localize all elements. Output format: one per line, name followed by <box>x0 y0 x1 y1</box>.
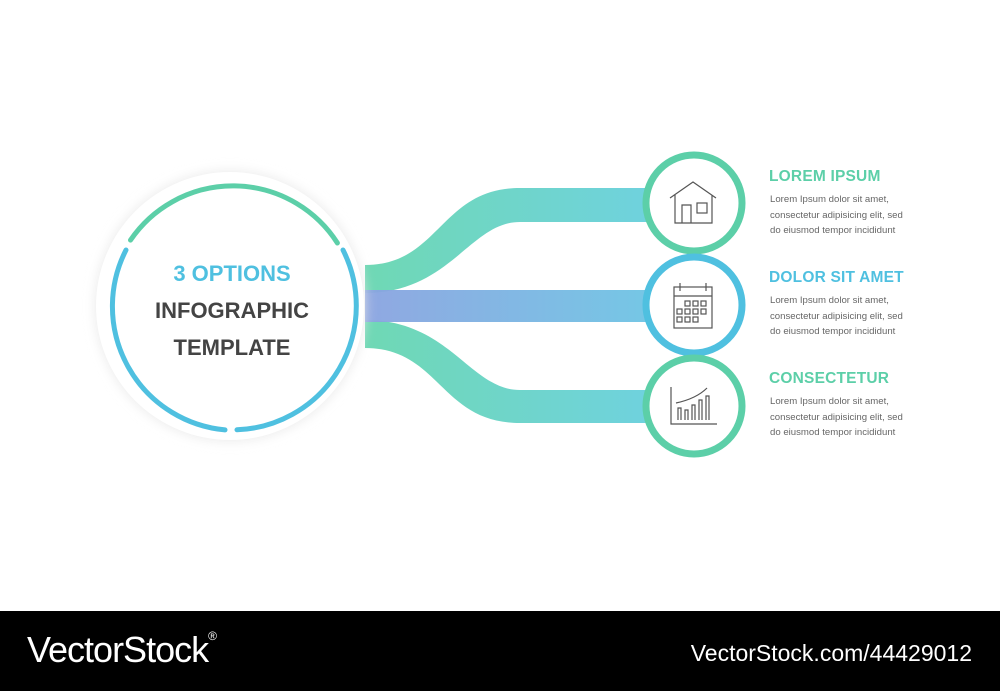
footer bar <box>0 611 1000 691</box>
option 3 text <box>769 370 903 438</box>
band: top <box>365 188 650 293</box>
text: LOREM IPSUM <box>769 168 881 185</box>
option 2 text <box>769 269 904 337</box>
text: DOLOR SIT AMET <box>769 269 904 286</box>
text: do eiusmod tempor incididunt <box>770 326 895 337</box>
text: Lorem Ipsum dolor sit amet, <box>770 295 889 306</box>
central circle: TEMPLATE <box>174 335 290 360</box>
circle 1: house <box>646 155 742 251</box>
option 1 text <box>769 168 903 236</box>
footer url: VectorStock.com/44429012 <box>691 640 972 666</box>
central circle <box>96 172 364 440</box>
text: consectetur adipisicing elit, sed <box>770 412 903 422</box>
text: CONSECTETUR <box>769 370 889 387</box>
central circle: INFOGRAPHIC <box>155 298 309 323</box>
text: Lorem Ipsum dolor sit amet, <box>770 194 889 205</box>
text: do eiusmod tempor incididunt <box>770 225 895 236</box>
text: consectetur adipisicing elit, sed <box>770 210 903 220</box>
band: bottom <box>365 320 650 423</box>
central circle: 3 OPTIONS <box>173 261 291 286</box>
footer logo: VectorStock® <box>27 629 216 670</box>
text: do eiusmod tempor incididunt <box>770 427 895 438</box>
text: Lorem Ipsum dolor sit amet, <box>770 396 889 407</box>
text: consectetur adipisicing elit, sed <box>770 310 903 322</box>
circle 3: chart <box>646 358 742 454</box>
band: middle <box>365 290 650 322</box>
circle 2: calendar <box>646 257 742 353</box>
